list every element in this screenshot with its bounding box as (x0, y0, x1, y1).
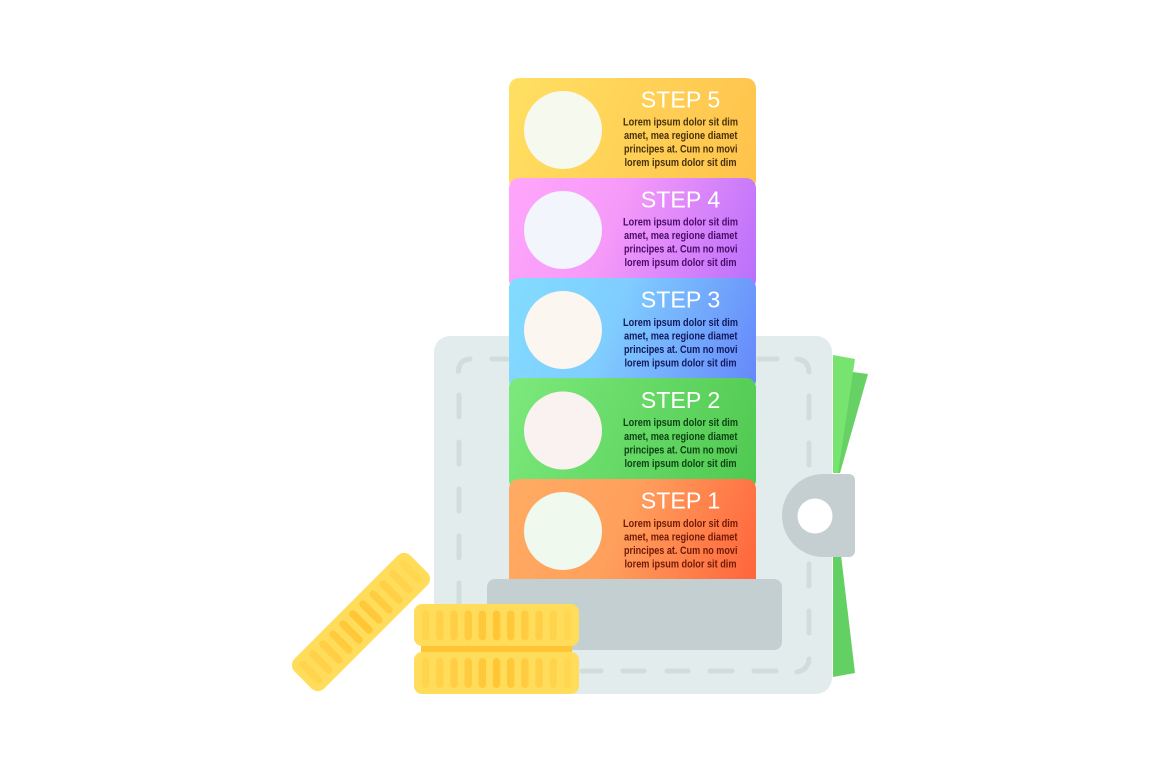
wallet clasp (782, 474, 855, 557)
step card 5: Lorem ipsum dolor sit dim (623, 116, 738, 128)
lower coin (414, 652, 579, 694)
step card 2: STEP 2 (641, 387, 720, 413)
step card 4: principes at. Cum no movi (624, 244, 738, 256)
step card 3: amet, mea regione diamet (624, 330, 738, 342)
step card 4: amet, mea regione diamet (624, 230, 738, 242)
step card 3: principes at. Cum no movi (624, 344, 738, 356)
step card 5: lorem ipsum dolor sit dim (624, 157, 737, 169)
step card 3: lorem ipsum dolor sit dim (624, 358, 737, 370)
step card 4: Lorem ipsum dolor sit dim (623, 216, 738, 228)
tilted coin (288, 549, 434, 695)
step card 1: lorem ipsum dolor sit dim (624, 558, 737, 570)
step card 2: Lorem ipsum dolor sit dim (623, 417, 738, 429)
step card 1 (509, 479, 756, 589)
step card 2 (509, 378, 756, 490)
step card 4: lorem ipsum dolor sit dim (624, 257, 737, 269)
step card 3: Lorem ipsum dolor sit dim (623, 317, 738, 329)
step card 1: amet, mea regione diamet (624, 532, 738, 544)
step card 2: lorem ipsum dolor sit dim (624, 458, 737, 470)
coin stack (414, 604, 579, 694)
step card 2: amet, mea regione diamet (624, 431, 738, 443)
step card 1: Lorem ipsum dolor sit dim (623, 518, 738, 530)
step card 5: STEP 5 (641, 86, 720, 112)
step card 5 (509, 78, 756, 190)
step card 3 (509, 278, 756, 390)
wallet stitching (458, 359, 809, 672)
step card 4: STEP 4 (641, 186, 720, 212)
step card 5: amet, mea regione diamet (624, 130, 738, 142)
upper coin (414, 604, 579, 646)
step card 3: STEP 3 (641, 286, 720, 312)
step card 1: principes at. Cum no movi (624, 545, 738, 557)
step card 4 (509, 178, 756, 290)
banknotes behind wallet (833, 355, 868, 677)
step card 2: principes at. Cum no movi (624, 444, 738, 456)
wallet pocket (487, 579, 782, 650)
step card 5: principes at. Cum no movi (624, 144, 738, 156)
wallet body (434, 336, 832, 694)
step card 1: STEP 1 (641, 488, 720, 514)
